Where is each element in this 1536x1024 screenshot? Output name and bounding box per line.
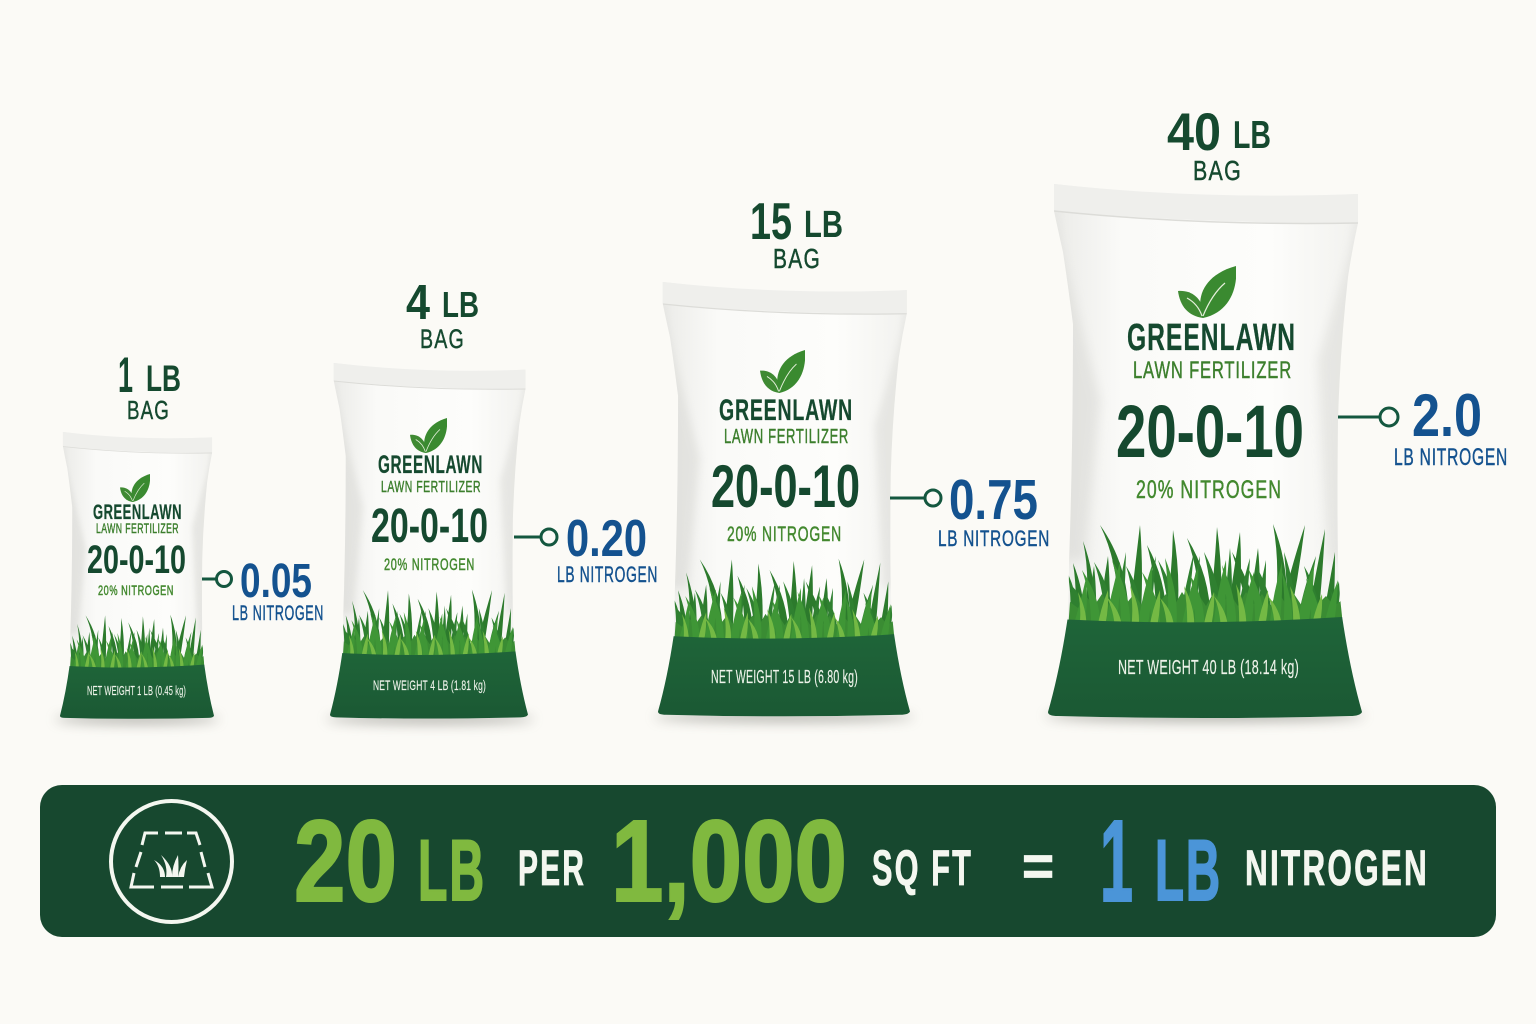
callout: 0.75 lb nitrogen: 0.75 <box>949 468 1038 532</box>
icon: leaf logo <box>410 418 447 453</box>
heading: 15 lb bag: LB <box>804 204 843 246</box>
text: 1,000: 1,000 <box>611 796 847 926</box>
bag: 15 lb <box>652 271 916 726</box>
text: 20 lb <box>294 796 486 926</box>
heading: 15 lb bag <box>750 193 843 274</box>
callout: 0.05 lb nitrogen <box>202 555 324 625</box>
heading: 4 lb bag: LB <box>442 284 479 325</box>
callout: 0.05 lb nitrogen: LB NITROGEN <box>232 602 324 625</box>
heading: 4 lb bag: BAG <box>420 324 465 354</box>
bag: 1 lb <box>55 424 219 725</box>
heading: 1 lb bag: 1 <box>118 347 133 403</box>
bag: 4 lb: GREENLAWN <box>378 451 483 479</box>
bag: 15 lb: 20% NITROGEN <box>727 523 842 546</box>
bag: 4 lb: NET WEIGHT 4 LB (1.81 kg) <box>373 677 486 693</box>
heading: 1 lb bag: BAG <box>127 395 170 425</box>
bag: 1 lb: 20% NITROGEN <box>98 582 174 598</box>
text: per: PER <box>518 840 586 896</box>
bag: 15 lb: NET WEIGHT 15 LB (6.80 kg) <box>711 667 858 687</box>
bag: 15 lb: LAWN FERTILIZER <box>724 426 849 448</box>
icon: lawn area with grass <box>111 801 232 922</box>
bag: 40 lb: GREENLAWN <box>1127 317 1296 359</box>
bag: 1 lb: 20-0-10 <box>87 538 186 582</box>
bag: 40 lb: 20% NITROGEN <box>1136 476 1282 504</box>
bag: 40 lb: 20-0-10 <box>1116 390 1304 473</box>
text: equals: = <box>1022 834 1058 899</box>
callout: 0.20 lb nitrogen <box>514 510 658 587</box>
icon: leaf logo <box>1178 266 1236 318</box>
callout: 2.0 lb nitrogen <box>1338 382 1508 471</box>
bag: 4 lb <box>325 354 534 727</box>
bag: 4 lb: LAWN FERTILIZER <box>381 479 481 496</box>
bag: 4 lb: 20-0-10 <box>371 500 488 553</box>
heading: 1 lb bag: LB <box>146 358 181 399</box>
heading: 1 lb bag <box>118 347 181 425</box>
bag: 40 lb <box>1040 170 1370 730</box>
icon: leaf logo <box>120 474 150 502</box>
text: 1 lb: LB <box>1155 823 1222 919</box>
text: 20 lb: LB <box>418 823 486 919</box>
bag: 4 lb: 20% NITROGEN <box>384 555 475 574</box>
bag: 40 lb: NET WEIGHT 40 LB (18.14 kg) <box>1118 657 1299 679</box>
callout: 0.75 lb nitrogen: LB NITROGEN <box>938 526 1050 551</box>
icon: leaf logo <box>760 350 805 393</box>
heading: 40 lb bag <box>1167 103 1271 186</box>
bag: 1 lb: GREENLAWN <box>93 501 182 524</box>
callout: 0.75 lb nitrogen <box>890 468 1050 551</box>
panel: 1 lb bag column <box>55 347 324 725</box>
panel: 40 lb bag column <box>1040 103 1508 730</box>
callout: 0.20 lb nitrogen: LB NITROGEN <box>557 562 658 587</box>
panel: 4 lb bag column <box>325 276 658 727</box>
callout: 0.20 lb nitrogen: 0.20 <box>566 510 647 568</box>
callout: 2.0 lb nitrogen: 2.0 <box>1412 382 1482 449</box>
text: 20 lb: 20 <box>294 796 397 926</box>
text: sq ft: SQ FT <box>872 840 973 896</box>
heading: 15 lb bag: 15 <box>750 193 792 251</box>
heading: 40 lb bag: 40 <box>1167 103 1221 162</box>
heading: 4 lb bag <box>406 276 479 354</box>
bag: 1 lb: LAWN FERTILIZER <box>96 520 179 536</box>
heading: 4 lb bag: 4 <box>406 276 430 330</box>
bag: 1 lb: NET WEIGHT 1 LB (0.45 kg) <box>87 683 186 698</box>
text: nitrogen: NITROGEN <box>1245 840 1429 896</box>
heading: 40 lb bag: BAG <box>1193 155 1242 186</box>
text: 1 lb: 1 <box>1100 796 1133 926</box>
bag: 15 lb: 20-0-10 <box>711 453 860 520</box>
heading: 40 lb bag: LB <box>1233 114 1271 157</box>
heading: 15 lb bag: BAG <box>773 243 821 274</box>
panel: rate banner <box>40 785 1496 937</box>
callout: 0.05 lb nitrogen: 0.05 <box>240 555 312 608</box>
panel: 15 lb bag column <box>652 193 1050 726</box>
text: 1 lb <box>1100 796 1222 926</box>
bag: 15 lb: GREENLAWN <box>719 394 853 427</box>
bag: 40 lb: LAWN FERTILIZER <box>1133 357 1292 384</box>
